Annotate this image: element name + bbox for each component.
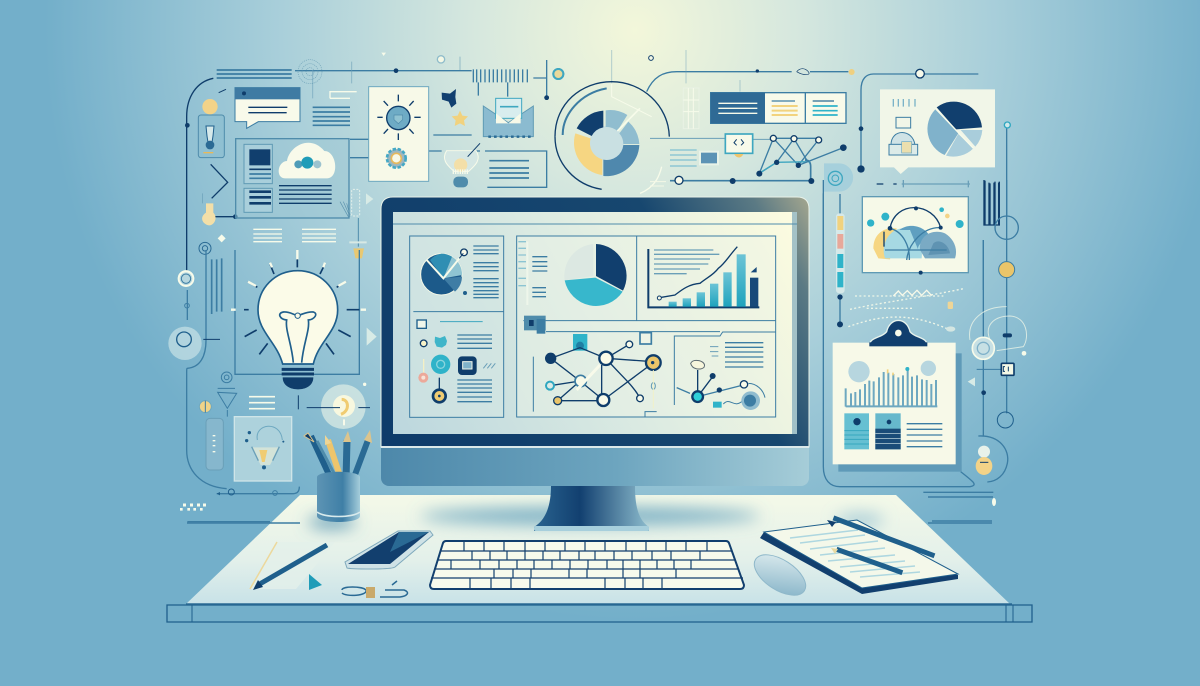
panel: desk <box>167 495 1032 622</box>
monitor screen <box>393 212 797 434</box>
panel: top right diagrams <box>544 50 1010 290</box>
icon: target swirl <box>199 242 211 254</box>
keyboard <box>430 541 744 589</box>
network diagram <box>756 135 847 177</box>
icon: rail nodes <box>168 271 377 509</box>
text lines <box>253 229 336 242</box>
panel: right rail diagrams <box>823 180 1027 492</box>
icon: lamp card <box>198 99 224 158</box>
panel: arcs chart <box>862 197 968 275</box>
panel: bulb and left rail <box>168 250 377 522</box>
phone <box>345 531 433 569</box>
icon: envelope <box>483 98 533 137</box>
icon: colored status column <box>836 213 845 327</box>
icon: chat window <box>235 88 300 128</box>
monitor chin <box>381 440 809 486</box>
connector lines <box>187 57 547 272</box>
desk front edge <box>167 604 1032 622</box>
monitor <box>381 197 809 531</box>
text lines <box>249 397 275 409</box>
dashboard contents <box>410 236 776 417</box>
connector lines <box>187 250 359 522</box>
text lines <box>313 107 350 125</box>
left pen with note <box>250 542 407 598</box>
icon: glowing light node <box>307 384 370 429</box>
pencil cup <box>304 430 372 522</box>
icon: paperclips <box>342 581 407 598</box>
icon: dotted hatch globe <box>298 60 322 84</box>
connector lines <box>612 50 1007 290</box>
right rail icons <box>946 262 1026 475</box>
icon: navy and yellow stars <box>442 89 468 126</box>
panel: top center and right <box>517 236 776 417</box>
icon: small bulb <box>444 143 480 187</box>
connector lines <box>823 180 1027 492</box>
panel: clipboard report <box>833 320 962 472</box>
icon: light bulb <box>231 250 366 389</box>
cup body <box>317 472 360 522</box>
text lines <box>489 161 529 178</box>
panel: left column <box>410 236 504 417</box>
panel: sketch bulb card <box>234 417 292 481</box>
connector nodes <box>544 56 1010 184</box>
pencils <box>304 430 372 480</box>
donut chart <box>555 82 669 193</box>
icon: chat bubble badge <box>824 163 853 192</box>
icon: yellow socket <box>349 218 367 258</box>
monitor bezel <box>381 197 809 447</box>
connector nodes <box>179 53 563 285</box>
dotted flow lines <box>848 288 965 330</box>
panel: cloud document <box>236 139 360 218</box>
mouse <box>748 547 812 603</box>
lower side details <box>183 497 996 523</box>
icon: hanging yellow bulb <box>202 193 216 225</box>
bar chart <box>648 247 759 307</box>
panel: node sketch <box>674 332 776 410</box>
text tabs <box>683 88 846 129</box>
monitor stand <box>534 486 649 531</box>
panel: pie chart callout <box>880 89 995 174</box>
network panel <box>524 316 720 417</box>
panel: sun and gear card <box>369 87 429 181</box>
panel: top left workspace diagrams <box>179 53 563 285</box>
notebook with pens <box>760 518 958 594</box>
icon: small monitor with link <box>650 134 753 186</box>
desk shadows <box>308 507 884 529</box>
